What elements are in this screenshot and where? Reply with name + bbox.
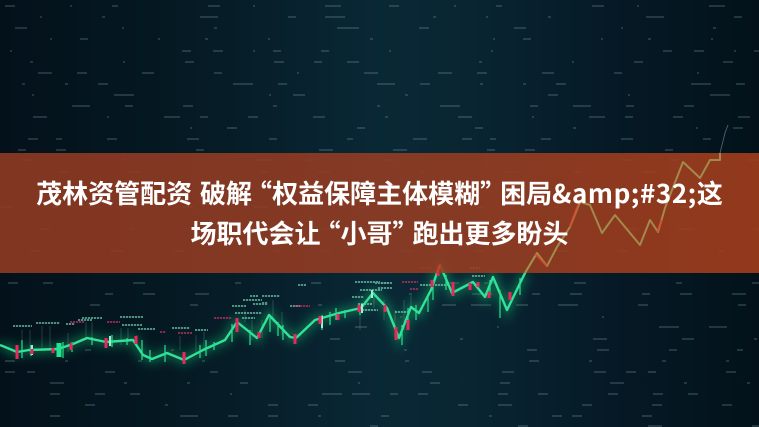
title line 2: 场职代会让“小哥”跑出更多盼头 [190, 214, 569, 251]
label drop lines [22, 292, 411, 355]
price line with candlesticks [0, 125, 728, 364]
banner [0, 153, 759, 273]
title line 1: 茂林资管配资 破解“权益保障主体模糊”困局&amp;#32;这 [36, 174, 723, 211]
chart glow [0, 265, 525, 360]
chart labels [13, 268, 485, 333]
